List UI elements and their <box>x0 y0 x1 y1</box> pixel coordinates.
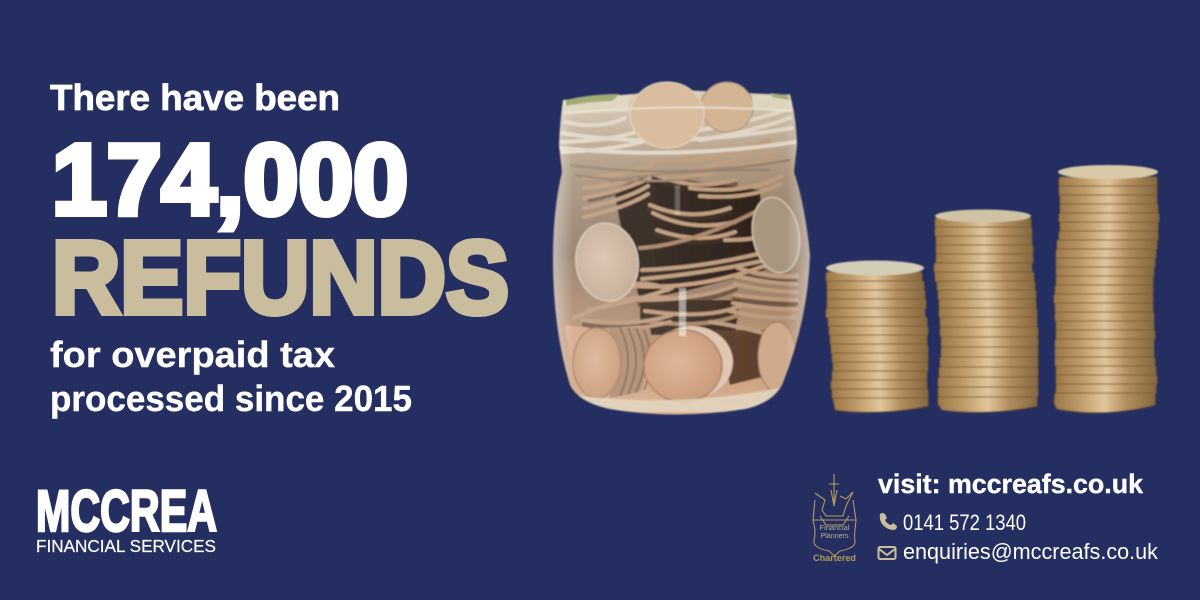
jar rim and protruding coins <box>563 82 793 148</box>
glass highlights <box>552 100 811 399</box>
badge: Chartered Financial Planners <box>813 474 856 563</box>
glass band of upper coins <box>560 110 795 153</box>
crest text line two: Planners <box>820 533 849 540</box>
email: enquiries@mccreafs.co.uk <box>903 539 1159 564</box>
crest text: Financial <box>820 525 850 532</box>
text: 174,000: 174,000 <box>52 124 408 236</box>
coin edges dark shadow <box>585 174 795 327</box>
chartered label: Chartered <box>813 553 856 563</box>
logo: McCrea Financial Services <box>36 479 217 556</box>
large right coin <box>750 196 801 274</box>
coin stacks <box>826 165 1159 413</box>
coin stack: tall <box>1054 165 1159 413</box>
stacked coin edges <box>574 140 797 335</box>
icon: envelope <box>878 547 896 559</box>
text: refunds: REFUNDS <box>52 220 509 335</box>
text: for overpaid tax: for overpaid tax <box>50 334 335 375</box>
bottom-right coin <box>758 322 796 392</box>
bottom-centre coin <box>644 326 733 402</box>
logo wordmark: MCCREA <box>36 479 217 544</box>
crest outline <box>813 474 856 556</box>
bottom-left coin roll <box>573 328 651 398</box>
phone number: 0141 572 1340 <box>903 510 1026 535</box>
text: there have been: There have been <box>50 77 340 118</box>
headline <box>50 77 509 419</box>
text: processed since 2015: processed since 2015 <box>50 378 412 419</box>
jar contents <box>550 90 812 420</box>
coin stack: medium <box>934 210 1038 412</box>
website: visit: mccreafs.co.uk <box>878 469 1144 499</box>
jar body <box>553 90 810 414</box>
contact details <box>878 469 1159 564</box>
icon: phone <box>880 513 897 530</box>
logo subline: FINANCIAL SERVICES <box>36 536 216 556</box>
coin jar illustration <box>550 82 812 420</box>
large left coin <box>574 222 640 302</box>
coin stack: short <box>826 260 928 412</box>
